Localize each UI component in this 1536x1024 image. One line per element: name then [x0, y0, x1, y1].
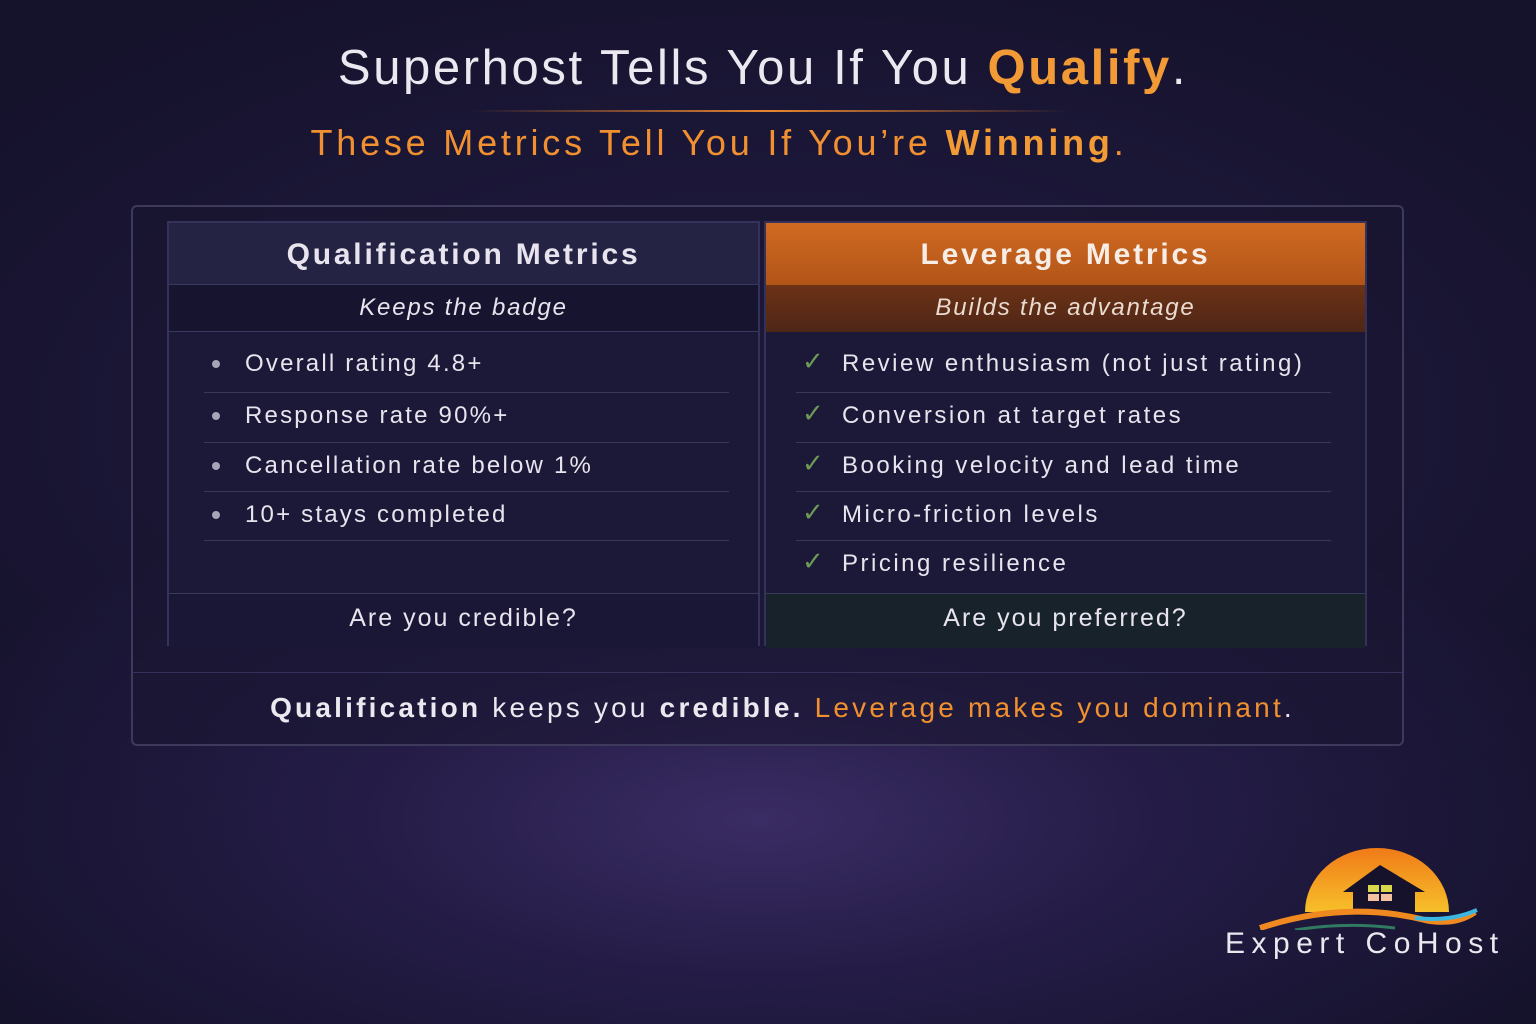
title: Superhost Tells You If You Qualify.	[338, 41, 1188, 95]
subtitle: These Metrics Tell You If You’re Winning.	[310, 122, 1128, 163]
list: leverage items: ✓	[802, 497, 824, 527]
summary line	[133, 672, 1402, 744]
list: leverage items: ✓	[802, 546, 824, 576]
list: leverage items: Conversion at target rates	[842, 402, 1183, 429]
tagline: Builds the advantage	[935, 294, 1196, 321]
divider glow	[470, 110, 1070, 112]
list: qualification items: Response rate 90%+	[245, 402, 509, 429]
list: leverage items: Booking velocity and lead time	[842, 452, 1241, 479]
heading: leverage	[766, 223, 1365, 285]
tagline	[766, 285, 1365, 332]
list: leverage items	[796, 346, 1331, 577]
heading: qualification	[169, 223, 758, 285]
list: leverage items: Pricing resilience	[842, 550, 1068, 577]
tagline	[169, 285, 758, 332]
footer question	[169, 593, 758, 648]
list: qualification items: 10+ stays completed	[245, 501, 508, 528]
panel: qualification metrics	[167, 221, 760, 646]
list: qualification items: Cancellation rate below 1%	[245, 452, 593, 479]
panel: outer frame	[131, 205, 1404, 746]
logo: Expert CoHost	[1225, 848, 1505, 960]
heading: qualification: Qualification Metrics	[287, 238, 640, 271]
list: qualification items	[204, 350, 729, 541]
footer question	[766, 593, 1365, 648]
list: leverage items: Review enthusiasm (not just rating)	[842, 350, 1304, 377]
panel: leverage metrics	[764, 221, 1367, 646]
logo: Expert CoHost: Expert CoHost	[1225, 927, 1505, 960]
list: leverage items: Micro-friction levels	[842, 501, 1100, 528]
footer question: Are you credible?	[349, 604, 578, 632]
tagline: Keeps the badge	[359, 294, 568, 321]
list: qualification items: Overall rating 4.8+	[245, 350, 484, 377]
footer question: Are you preferred?	[943, 604, 1188, 632]
list: leverage items: ✓	[802, 448, 824, 478]
list: leverage items: ✓	[802, 398, 824, 428]
heading: leverage: Leverage Metrics	[921, 238, 1210, 271]
summary line: Qualification keeps you credible. Leverage makes you dominant.	[270, 692, 1295, 723]
list: leverage items: ✓	[802, 346, 824, 376]
